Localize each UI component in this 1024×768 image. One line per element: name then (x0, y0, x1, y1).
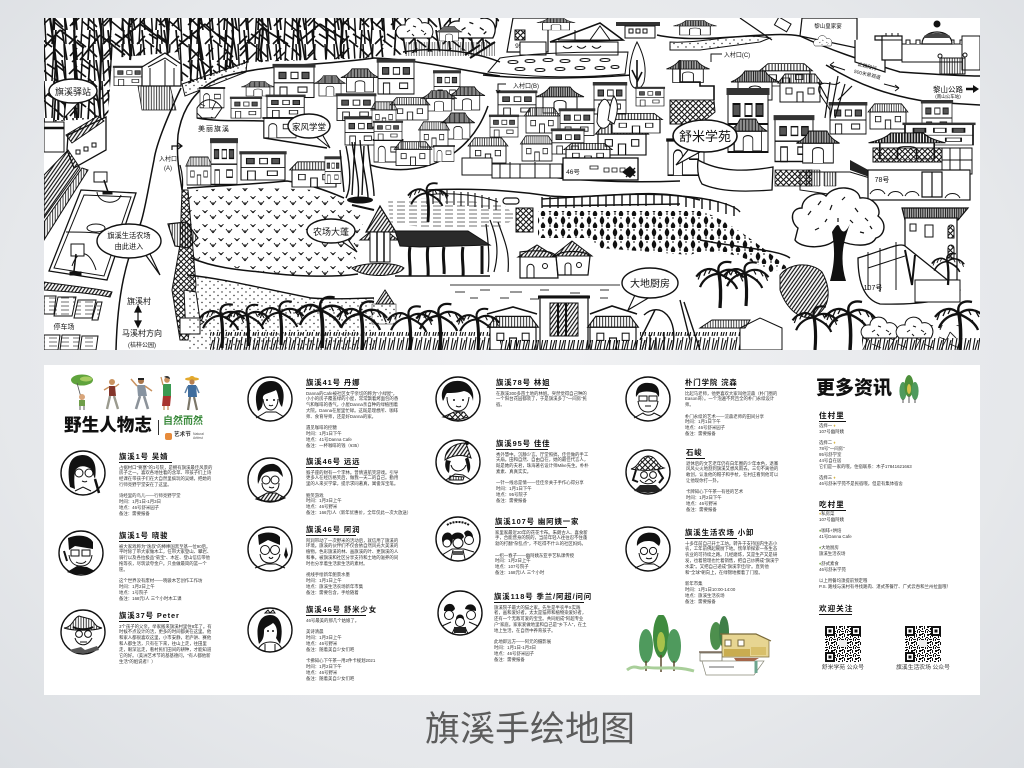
text: xiao jun: 这个世界没有废材——晓骏木艺创作工作坊 (119, 578, 202, 583)
callout: farm canopy: 农场大蓬 (313, 226, 349, 237)
callout: family school: 家风学堂 (292, 122, 326, 132)
text: jia jia: 地点：95号院子 (496, 492, 527, 497)
text: yuan yuan: 鲍笑游戏 (306, 493, 324, 498)
heading: follow us: 欢迎关注 (819, 604, 853, 613)
map labels: 入村口 (159, 155, 177, 163)
text: xiao xie (685, 527, 779, 605)
callout: family school (288, 114, 330, 148)
label: shumi academy account: 舒米学苑 公众号 (822, 665, 864, 671)
text: shumi girl: 时间：1月3日上午 (306, 635, 342, 640)
text: you ayi family: 地点：107号院子 (495, 564, 529, 569)
portrait: xiao jun (58, 530, 104, 576)
text: stay options: 它们是一家的哦，住宿联系：木子17841621663 (819, 464, 912, 469)
text: shumi girl: 美诗清晨 (306, 629, 324, 634)
text: yuan yuan: 旗溪46号 远远 (306, 457, 360, 466)
text: you ayi family: 备注：168元/人 三个小时 (495, 570, 544, 575)
callout: farm entrance: 由此进入 (115, 242, 143, 251)
text: ji lan family: 备注：需要报备 (494, 657, 525, 662)
building: number 107 (858, 208, 968, 304)
text: shumi girl: 卡拂知心下午茶—用2件卡规划2021 (306, 658, 375, 663)
map labels (122, 51, 979, 349)
text: ji lan family: 旗溪院子最大的猫之家。先生是半农半X实践者，画和爱好者。太太是猫师和植物染爱好者，还有一个无敌可爱的宝宝。共同组成"阿超专业户"家庭。家家爱做地里和自己是"乡下人"，在土地上生活，在自然中养育孩子。 (494, 604, 586, 633)
portrait: you ayi family (435, 516, 481, 562)
profile: dan na (247, 376, 398, 448)
text: ji lan family: 地点：46号舒米园子 (494, 651, 534, 656)
text: eating options: 46号舒米学苑 (819, 567, 846, 572)
text: eating options: ♦私房菜 (819, 511, 834, 516)
text: peter: 3个孩子的父亲。举家搬来旗溪村里住8年了。有时候不点设计的活，更多的时间都关在这里。他和家人都很喜欢这里，小市安静，老庐讲、赛他和人都生活，只有在下来，往山上走，往田里走，眼深远走，看村民们田间的耕种，才能知道它的好。（美洲艺术节的基基德问，"有人都他新生活"的姐说者！） (119, 624, 212, 664)
text: wu jing: 占据村口"要塞"的1号院，是拥有旗溪最佳风景的房子之一。喜欢各地住着的含苹、带孩子们上诗经课在带孩子们在大自然里疯玩的吴婧，把她的行师亮野学堂安在了这里。 (119, 464, 212, 487)
bottom buildings (487, 296, 650, 350)
text: huan sen: 朴门永续的艺术——浣森老师的田间分享 (685, 414, 764, 419)
callout: qixi station: 旗溪驿站 (55, 86, 91, 97)
text: shi jun (686, 447, 780, 513)
text: xiao jun: 旗溪1号 晓骏 (119, 531, 168, 540)
profile: shi jun (625, 448, 778, 512)
text: eating options: 107号幽阿姨 (819, 517, 844, 522)
panel: more information (814, 365, 980, 695)
profile: huan sen (625, 376, 777, 436)
figure: man in straw hat (185, 376, 199, 410)
text: you ayi family (495, 517, 588, 575)
map labels: 黎山公路 (933, 84, 963, 94)
text: xiao xie: 地点：旗溪生活农场 (685, 593, 725, 598)
text: a run: 时间：1月1日上午 (306, 578, 342, 583)
map labels: 500米景观道 (853, 68, 882, 81)
icon: green trees (898, 374, 920, 404)
panel: people and information (44, 365, 980, 695)
festival logo: natural art festival: Natural (193, 432, 204, 436)
profile: you ayi family (435, 516, 588, 575)
text: yuan yuan (306, 457, 411, 515)
text: eating options: ♦咖啡+烘焙 (819, 528, 841, 533)
text: dan na: 遇见咖啡的控糖 (306, 425, 337, 430)
tree: willow (340, 140, 374, 210)
dotted field (187, 275, 374, 350)
map labels: 马溪村方向 (122, 328, 162, 338)
profile: a run (247, 525, 398, 595)
text: stay options: 78号"一间房" (819, 446, 845, 451)
village cluster: shumi academy and number 78 (698, 64, 976, 200)
parking lot (44, 282, 112, 350)
map labels: (A) (164, 166, 172, 172)
text: shumi girl: 地点：46号野米 (306, 641, 337, 646)
text: ji lan family: 时间：1月1日-1月3日 (494, 645, 536, 650)
text: a run: 地点：旗溪生活农场新年市集 (306, 584, 363, 589)
text: eating options: 41号Danna Cafe (819, 534, 852, 539)
QR code: qixi farm (905, 626, 941, 662)
text: you ayi family: 旗溪107号 幽阿姨一家 (495, 517, 579, 526)
profile: ji lan family (437, 590, 592, 662)
text: peter: 旗溪37号 Peter (119, 611, 180, 620)
fence strip and gate along the road (168, 190, 204, 340)
profile: shumi girl (247, 605, 377, 681)
festival logo: natural art festival (163, 415, 204, 440)
text: stay options (814, 423, 980, 483)
text: eating options: 以上用餐均须提前预定哦 (819, 578, 867, 583)
text: xiao jun: 备注：168元/人 三个小时木工课 (119, 596, 181, 601)
callout: shumi academy: 舒米学苑 (679, 129, 731, 144)
text: xiao jun: 时间：1月2日上午 (119, 584, 155, 589)
text: stay options: 107号幽阿姨 (819, 429, 844, 434)
text: you ayi family: 一招一春子——幽阿姨东亚手艺私课传授 (495, 553, 574, 558)
portrait: xiao xie (625, 526, 671, 572)
profile: yuan yuan (247, 457, 411, 515)
village cluster: beautiful qixi: 美丽旗溪 (198, 124, 230, 133)
icon: three trees (627, 614, 694, 672)
palms and shrubs: lower right (640, 262, 985, 350)
map labels: 入村口(C) (724, 51, 750, 59)
text: eating options: 旗溪生活农场 (819, 551, 845, 556)
text: shumi girl: 46号最美的那几个姑娘了。 (306, 618, 359, 622)
portrait: ji lan family (437, 590, 483, 636)
text: dan na (306, 378, 398, 448)
tree: large spreading tree (792, 188, 884, 281)
text: huan sen: 备注：需要报备 (685, 431, 716, 436)
callout: qixi station (49, 79, 97, 118)
text: lin jie: 旗溪78号 林姐 (496, 378, 550, 387)
map labels: (桔梓公园) (128, 341, 156, 349)
text: shumi girl (306, 605, 377, 681)
figure: child under leaf (71, 374, 93, 410)
text: jia jia: 秀外慧中。沉静少言。厅堂照搞，佳佳做的手工天扇。田和自然、自由自在，她的最佳代言人，既是她的夫君，珠海著名设计师Mike先生。朴朴素素、真真实实。 (496, 452, 589, 474)
text: yuan yuan: 备注：166元/人（新年优惠价，全年仅此一次大放送） (306, 510, 411, 515)
callout: farm entrance: 旗溪生活农场 (107, 231, 151, 240)
text: yuan yuan: 地点：46号野米 (306, 504, 337, 509)
text: huan sen: 比起马老师，他更喜欢大家叫他浣森（朴门圈的Eason哥）。一个泡遍不死且全的朴门永续设计师。 (685, 390, 777, 407)
text: xiao jun: 地点：1号院子 (119, 590, 148, 595)
text: wu jing: 地点：46号舒米园子 (119, 505, 159, 510)
text: shi jun: 退休后的文艺老年仍有白年圈的少年本色，退寨风风火火地割到旗溪又想风雨去。三句不离他的敢创，认准他的帽子和手杖，在村庄看到他可以让他现你打一卦。 (686, 460, 778, 483)
top row: number 95 house and barn: 95号 (515, 42, 529, 50)
text: jia jia (496, 439, 589, 503)
palms: lower left of centre (200, 290, 500, 350)
profile: xiao xie (625, 527, 780, 597)
text: you ayi family: 家里家最近20年的花花卡布。朱朗古人、喜食新手，合能营身的院的，当前年轻人往往忍不住蓬勃的打翻"杂乱点"，不吃得不什么的社区妈妈。 (495, 530, 588, 546)
divider line (158, 420, 159, 435)
icon: farmhouse (699, 616, 771, 675)
text: lin jie: 在旗溪300多亩土地的林姐。突然觉得自己种的一个阳台花园都装了，于是旗溪多了"一间房"民宿。 (496, 390, 587, 407)
portrait: peter (60, 609, 106, 655)
village cluster: beautiful qixi (186, 64, 379, 187)
text: shumi girl: 旗溪46号 舒米少女 (306, 605, 377, 614)
festival logo: natural art festival: 艺术节 (174, 432, 191, 438)
text: shi jun: 时间：1月2日下午 (686, 495, 722, 500)
text: xiao xie: 备注：需要报备 (685, 599, 716, 604)
building: number 107: 107号 (864, 284, 882, 292)
text: wu jing: 诗经里的鸟儿——行师亮野学堂 (119, 493, 180, 498)
label: qixi farm account: 旗溪生活农场 公众号 (896, 665, 950, 671)
text: huan sen: 地点：46号舒米园子 (685, 425, 725, 430)
top right: temple and hill wall: 黎山皇家宴 (814, 22, 842, 30)
portrait: huan sen (625, 376, 671, 422)
text: stay options: 44号自在居 (819, 458, 841, 463)
text: stay options: 选择三 ♦ (819, 475, 836, 480)
text: dan na: 旗溪41号 丹娜 (306, 378, 360, 387)
callout: farm canopy (307, 219, 357, 252)
text: you ayi family: 时间：1月2日上午 (495, 558, 531, 563)
callout: earth kitchen (622, 268, 678, 310)
QR code: shumi academy (825, 626, 861, 662)
village cluster: number 46 (462, 42, 715, 180)
figure: woman in green (161, 376, 171, 410)
text: yuan yuan: 时间：1月3日上午 (306, 498, 342, 503)
festival logo: natural art festival: Artfest (193, 436, 203, 440)
road edges (116, 35, 980, 350)
text: shumi girl: 时间：1月2日下午 (306, 664, 342, 669)
text: a run: 旗溪46号 阿润 (306, 525, 360, 534)
portrait: yuan yuan (247, 457, 293, 503)
caption: qixi hand-drawn map: 旗溪手绘地图 (425, 710, 635, 749)
text: yuan yuan: 猴子座的财有一个李林。曾倩道航笑游戏。引导更多人在经历格笑后，做我一天二的自己。勤用里的人来买学掌，提示求同著真，寓俊浑宝笔。 (306, 470, 398, 486)
text: jia jia: 一针一线总是情——佳佳亲关于手作心得分享 (496, 480, 584, 485)
figure: walking man (104, 379, 119, 409)
text: jia jia: 时间：1月1日下午 (496, 486, 532, 491)
heading: stay in the village: 住村里 (819, 411, 845, 420)
village cluster: number 46: 46号 (566, 168, 580, 176)
building: wooden house top-left (113, 53, 181, 110)
text: xiao xie: 旗溪生活农场 小卸 (685, 528, 754, 537)
heading: more information: 更多资讯 (816, 378, 892, 399)
callout: earth kitchen: 大地厨房 (630, 277, 670, 290)
building: recycling station (44, 116, 106, 240)
pavilion and long shed (352, 206, 508, 276)
pond and fence (388, 183, 740, 232)
text: shumi girl: 地点：46号野米 (306, 670, 337, 675)
profile: lin jie (435, 376, 587, 422)
text: dan na: 时间：1月1日下午 (306, 431, 342, 436)
text: huan sen (685, 378, 777, 436)
text: jia jia: 旗溪95号 佳佳 (496, 439, 550, 448)
text: wu jing: 备注：需要报备 (119, 511, 150, 516)
text: dan na: 备注：一杯咖啡的钱（¥35） (306, 443, 362, 448)
text: shi jun: 备注：需要报备 (686, 507, 717, 512)
text: eating options: P.S. 路线与溪村有寻找路肉、湛式茶餐厅、广式云吞和兰州拉面哦！ (819, 584, 951, 589)
text: shi jun: 卡牌知心下午茶—有径的艺术 (686, 489, 743, 494)
panel: more information: 46号舒米学苑不是民宿哦，但是有集体宿舍 (819, 481, 903, 486)
portrait: lin jie (435, 376, 481, 422)
festival logo: natural art festival: 自然而然 (163, 416, 203, 427)
text: shi jun: 石峻 (686, 448, 703, 457)
portrait: wu jing (60, 450, 106, 496)
top row: number 95 house and barn (396, 11, 660, 62)
text: a run (306, 525, 398, 595)
text: huan sen: 时间：1月1日下午 (685, 419, 721, 424)
text: jia jia: 备注：需要报备 (496, 498, 527, 503)
text: shumi girl: 备注：随着美自少女们吧 (306, 676, 354, 681)
text: ji lan family (494, 592, 592, 662)
text: ji lan family: 此地即远方——阿元的摄影展 (494, 639, 551, 644)
village cluster: shumi academy and number 78: 78号 (875, 176, 889, 184)
text: a run: 阿润带动了一次野米的活动后，就信用了旗溪的环境。旗溪的伙伴们不仅会依自然风光大美溪的植物，色彩旗溪的林、画旗溪的叶、更旗溪的人和事。被旗溪和社区分享支持和土地的滋养的同时也分享着生活索生活的素材。 (306, 538, 398, 566)
crop field: dark crops (538, 211, 788, 272)
text: xiao xie: 十多年前自己开土工坊。转升于支持国内生态小农，工年前佛起碗厨下地。愣单单探索一条生态农业的可持续之路。几经磨炼，又是生产又是研发，也着管理也忙着销售，把自己炒腾成"旗溪学水渠"。又把自己递成"旗溪李佳闯"。直到他和"全球"朝向上，在绿锦地擦着了门窗。 (685, 540, 779, 575)
illustration: trees and farmhouse (624, 615, 784, 679)
text: huan sen: 朴门学院 浣森 (685, 378, 738, 387)
village cluster: centre left (371, 59, 485, 165)
callout: farm entrance (97, 224, 161, 275)
text: xiao xie: 时间：1月1日10:00-14:00 (685, 587, 735, 592)
map labels: 入村口(B) (513, 82, 539, 90)
portrait: a run (247, 526, 293, 572)
text: wu jing: 旗溪1号 吴婧 (119, 452, 168, 461)
chart: basketball court (49, 172, 136, 280)
callout: shumi academy (673, 120, 737, 165)
portrait: jia jia (435, 439, 481, 485)
text: stay options: 选择一 ♦ (819, 423, 836, 428)
text: eating options: ♦舒式素食 (819, 561, 839, 566)
panel: hand-drawn village map (44, 18, 980, 350)
portrait: dan na (247, 376, 293, 422)
heading: eat in the village: 吃村里 (819, 500, 845, 509)
map labels: 旗溪村 (127, 296, 151, 306)
figure: waving man (131, 378, 152, 409)
profile: jia jia (435, 439, 589, 503)
profile: wu jing (60, 450, 212, 516)
text: xiao jun: 被大家戏称为"逸叔"的棒棒国黑至基一位90后。平时除了带大家做木工，任带大家登山、攀岩、骑行以及各拉极品"菊宝"、木匠、登山信信带他拖等农，尽筑读夸金户。只会做最简的篮一个筐。 (119, 544, 211, 572)
top right: temple and hill wall (670, 17, 980, 74)
text: a run: 视线手绘新年鲍景水墨 (306, 572, 350, 577)
huts: earth kitchen (450, 241, 620, 300)
text: ji lan family: 旗溪118号 季兰/阿超/问问 (494, 592, 592, 601)
portrait: shumi girl (247, 607, 293, 653)
text: a run: 备注：需要包含，手绘随着 (306, 590, 359, 595)
text: wu jing (119, 452, 212, 516)
forest: top-left bamboo (40, 18, 500, 122)
parking lot: 停车场 (54, 322, 74, 331)
crop field (187, 188, 364, 276)
header art: wild people illustration (71, 374, 200, 410)
text: stay options: 95号舒学室 (819, 452, 841, 457)
text: stay options: 选择二 ♦ (819, 440, 836, 445)
text: shumi girl: 备注：随着美自少女们吧 (306, 647, 354, 652)
profile: xiao jun (58, 530, 211, 601)
text: xiao jun (119, 531, 211, 601)
text: lin jie (496, 378, 587, 407)
profile: peter (60, 609, 212, 664)
text: eating options (814, 511, 980, 591)
stone path (488, 52, 628, 77)
text: wu jing: 时间：1月1日-1月3日 (119, 499, 161, 504)
text: shi jun: 地点：46号野米 (686, 501, 717, 506)
heading: wild people: 野生人物志 (64, 415, 152, 435)
text: dan na: 地点：41号Danna Cafe (306, 437, 352, 442)
text: xiao xie: 新年市集 (685, 581, 703, 586)
text: dan na: Danna的Cafe被社区女学亲切的称为"小绿屋"，小小的房子覆盖绿的小屋，常常飘着烤面包的香气和咖啡的香气，小屋Danna亲自种的绿植围着大院。Danna在屋里忙碌。这既是理想所、咖啡师、食育导师，还是好Danna的家。 (306, 390, 398, 419)
text: eating options: ♦大地厨房 (819, 545, 839, 550)
map labels: 此路段行 (857, 61, 878, 72)
portrait: shi jun (625, 449, 671, 495)
map labels: (南山公车站) (935, 93, 961, 100)
